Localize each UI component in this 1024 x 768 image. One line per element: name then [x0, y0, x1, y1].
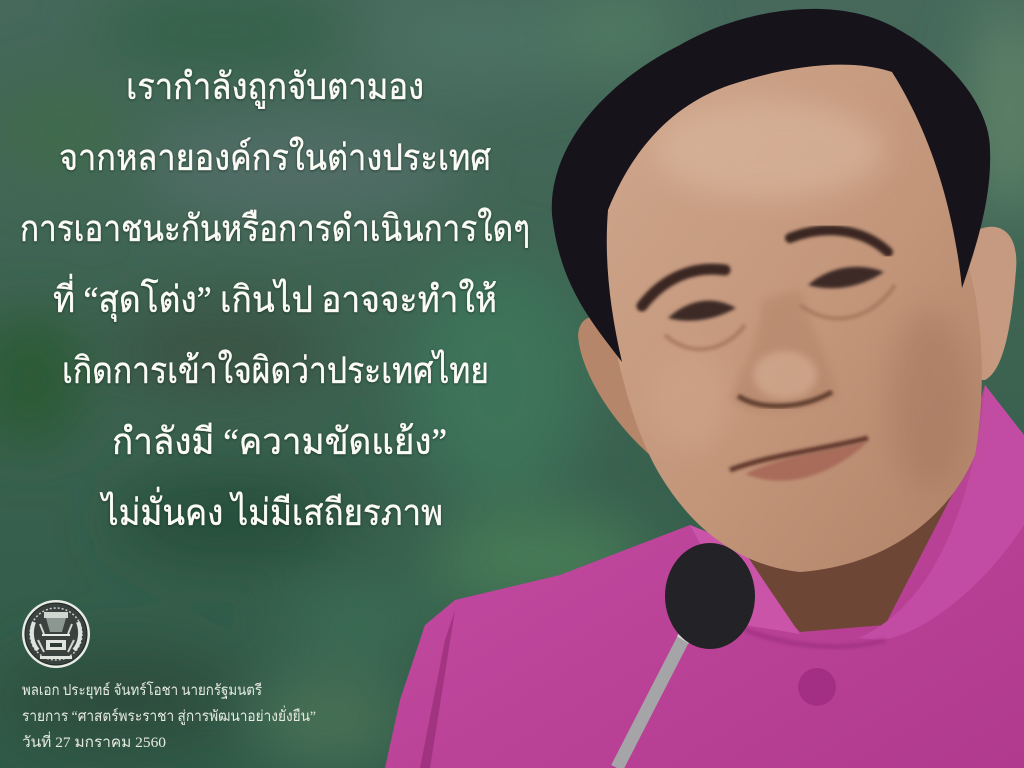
ears	[950, 227, 1016, 380]
main quote text: เรากำลังถูกจับตามอง	[126, 67, 424, 109]
hair	[552, 9, 990, 362]
main quote text: เกิดการเข้าใจผิดว่าประเทศไทย	[62, 349, 489, 392]
main quote text: กำลังมี “ความขัดแย้ง”	[112, 422, 447, 463]
jacket shading and button	[420, 610, 455, 768]
neck	[735, 470, 965, 632]
main quote text	[20, 67, 530, 534]
main quote text: การเอาชนะกันหรือการดำเนินการใดๆ	[20, 207, 530, 250]
brows	[642, 269, 725, 306]
footer: attribution	[22, 681, 316, 751]
jacket	[385, 385, 1024, 768]
main quote text: ที่ “สุดโต่ง” เกินไป อาจจะทำให้	[53, 273, 497, 322]
eyes	[668, 301, 736, 321]
footer: attribution: วันที่ 27 มกราคม 2560	[22, 731, 166, 751]
microphone	[617, 622, 692, 768]
portrait photo placeholder: man in magenta jacket	[385, 9, 1024, 768]
forehead highlight	[655, 100, 885, 200]
icon: government seal	[22, 600, 90, 668]
footer: attribution: พลเอก ประยุทธ์ จันทร์โอชา นายกรัฐมนตรี	[22, 681, 262, 700]
mouth	[745, 442, 868, 481]
face	[600, 54, 982, 572]
main quote text: จากหลายองค์กรในต่างประเทศ	[59, 136, 491, 179]
main quote text: ไม่มั่นคง ไม่มีเสถียรภาพ	[99, 486, 443, 534]
footer: attribution: รายการ “ศาสตร์พระราชา สู่การพัฒนาอย่างยั่งยืน”	[22, 705, 316, 725]
collar	[690, 525, 800, 634]
nose	[730, 290, 838, 413]
